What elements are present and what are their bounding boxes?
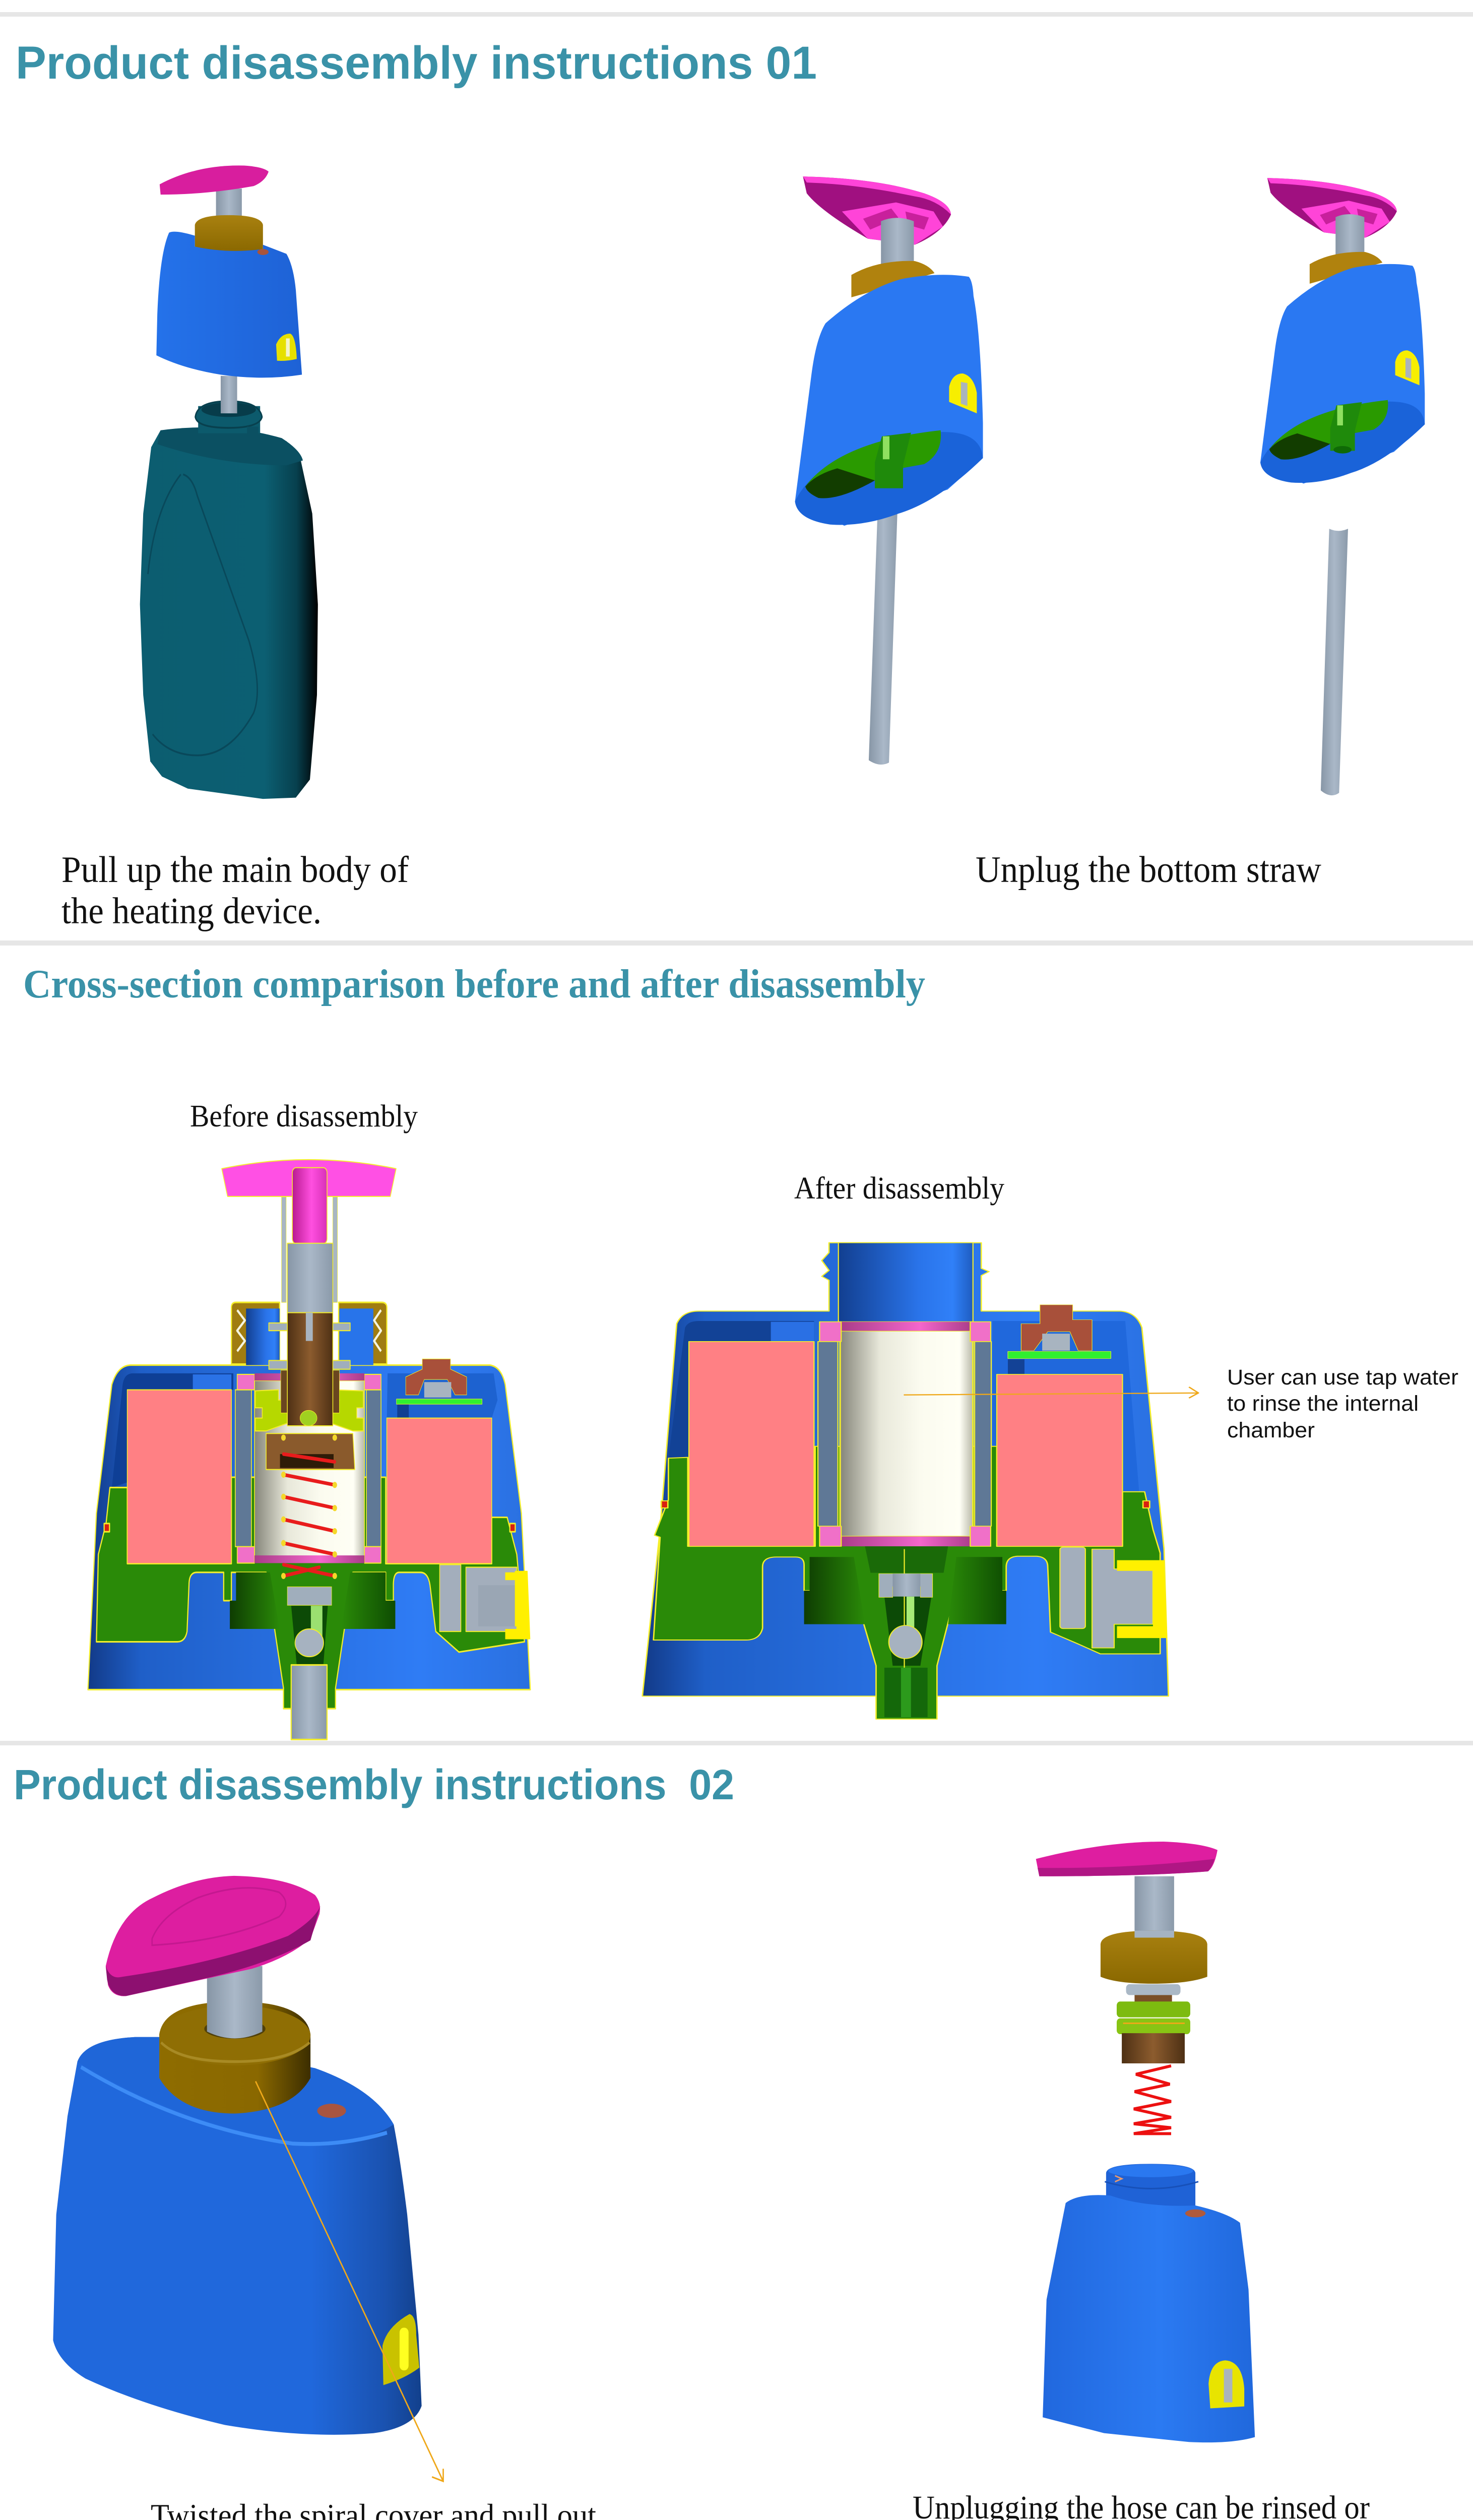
green base (96, 1477, 525, 1709)
yellow tab (276, 334, 297, 361)
illustration: pump lifted out of teal bottle (140, 165, 318, 799)
gray ball (889, 1625, 922, 1659)
brown piston (287, 1312, 333, 1426)
illustration: large pump head assembled (53, 1876, 443, 2481)
side seal dots (104, 1524, 515, 1532)
outer shell (643, 1243, 1169, 1696)
green PCB (397, 1399, 482, 1404)
yellow plug (505, 1571, 530, 1639)
caption: pull up: Pull up the main body of (61, 849, 409, 891)
side seal dots (661, 1501, 1149, 1508)
spring end dots (281, 1434, 337, 1579)
title: instructions 02: Product disassembly instructions 02 (14, 1761, 734, 1808)
valve interior (291, 1606, 328, 1668)
green base (654, 1446, 1160, 1719)
pink cap (160, 165, 269, 195)
side strips (235, 1390, 251, 1547)
cream chamber (254, 1380, 364, 1559)
blue body (1043, 2195, 1255, 2442)
brown piston (1122, 2033, 1185, 2063)
yellow plug (1117, 1560, 1167, 1638)
note: rinse chamber: User can use tap water (1227, 1365, 1458, 1390)
stem (216, 188, 242, 225)
lime seals (255, 1390, 363, 1431)
lower straw (221, 376, 237, 413)
pink cap (1036, 1842, 1218, 1876)
label: after: After disassembly (794, 1171, 1004, 1206)
spring (283, 1454, 335, 1576)
heater block right (997, 1374, 1122, 1546)
illustration: pump with straw, straw unplugged (795, 176, 1425, 795)
washer (1126, 1984, 1181, 1995)
button assembly (406, 1359, 467, 1395)
section divider 2 (0, 940, 1473, 946)
straw attached (869, 483, 899, 765)
button dot (258, 249, 269, 255)
pink T cap (222, 1160, 396, 1196)
pink seals (819, 1322, 991, 1546)
stem (1134, 1876, 1174, 1938)
pink cap (106, 1876, 320, 1996)
neck tube (839, 1243, 973, 1322)
brown cup (266, 1433, 355, 1470)
cream chamber (840, 1331, 973, 1537)
inner cavity top (668, 1321, 814, 1458)
pink seals (237, 1374, 381, 1563)
teal bottle body (140, 430, 318, 799)
gold collar (195, 215, 263, 251)
yellow tab (382, 2314, 419, 2385)
red button (1185, 2210, 1205, 2217)
label: before: Before disassembly (190, 1099, 418, 1133)
section divider top (0, 12, 1473, 17)
green seal (1117, 2001, 1190, 2018)
nozzle (884, 1668, 928, 1717)
button assembly (1021, 1305, 1092, 1351)
gray ball (295, 1629, 324, 1657)
heading: cross-section: Cross-section comparison before and after disassembly (23, 962, 925, 1006)
outer shell (88, 1365, 530, 1689)
pump with straw (795, 176, 983, 526)
pink rod (292, 1168, 327, 1244)
valve stem (865, 1546, 948, 1573)
yellow tab (1208, 2360, 1244, 2409)
detached straw (1321, 529, 1348, 795)
cross-section after disassembly (643, 1243, 1198, 1719)
gray stem (207, 1966, 263, 2038)
caption: pull up second line: the heating device. (61, 891, 322, 932)
illustration: exploded pump (1036, 1842, 1255, 2442)
dark green windows (230, 1572, 280, 1629)
cross-section before disassembly (88, 1160, 530, 1739)
side strips (818, 1342, 838, 1526)
gray seal (879, 1573, 933, 1597)
heater block right (387, 1418, 492, 1563)
gold threaded cap (231, 1302, 387, 1364)
gray cylinder (287, 1243, 333, 1312)
pink bands (840, 1322, 973, 1331)
smaller pump without straw (1260, 178, 1425, 483)
green PCB (1008, 1351, 1111, 1359)
gold ring (1101, 1931, 1207, 1984)
gold ring (159, 2001, 310, 2114)
charging port (1060, 1547, 1085, 1628)
blue neck (1106, 2164, 1195, 2211)
straw (291, 1665, 327, 1739)
spring (1134, 2066, 1171, 2133)
blue body (53, 2037, 422, 2435)
arrow to note (904, 1387, 1198, 1398)
top surface (78, 2037, 394, 2142)
dark green windows (804, 1557, 865, 1624)
charging port (439, 1564, 461, 1631)
brown sleeves (281, 1370, 339, 1413)
note: rinse chamber: to rinse the internal (1227, 1392, 1419, 1416)
sleeves (282, 1197, 286, 1302)
heater block left (127, 1390, 231, 1563)
green ball (300, 1410, 317, 1426)
red button (317, 2104, 346, 2118)
title: instructions 01: Product disassembly instructions 01 (16, 37, 817, 89)
note: rinse chamber (1227, 1365, 1458, 1442)
section divider 3 (0, 1741, 1473, 1745)
gray clips (269, 1323, 350, 1369)
note: rinse chamber: chamber (1227, 1418, 1315, 1442)
arrow (255, 2082, 443, 2481)
caption: unplug straw: Unplug the bottom straw (976, 849, 1322, 891)
blue cover (156, 232, 302, 377)
heater block left (689, 1342, 814, 1546)
